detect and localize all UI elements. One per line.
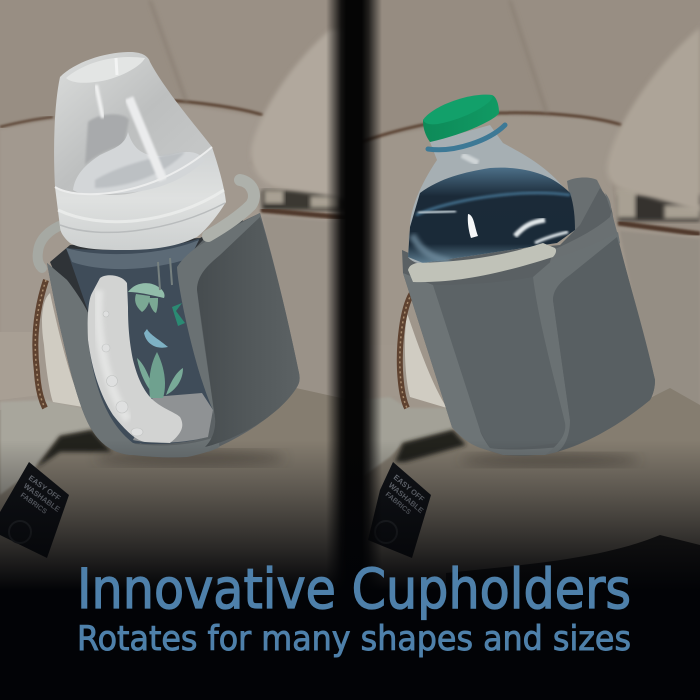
fabric label: FABRICS: [384, 491, 412, 516]
collar: [55, 147, 226, 250]
fabric label: EASY OFF: [392, 473, 426, 504]
fabric label: WASHABLE: [387, 481, 425, 515]
seat cushion: [0, 388, 342, 582]
holder right panel: [553, 237, 655, 402]
car seat backdrop: [0, 0, 350, 480]
holder rim band: [177, 213, 262, 452]
holder front body: [403, 193, 655, 455]
holder back shadow: [50, 220, 243, 312]
holder shadow: [460, 453, 640, 467]
seat back gap and piping: [262, 190, 350, 210]
car seat backdrop: [364, 0, 700, 434]
holder left strip: [403, 273, 560, 455]
title: Innovative Cupholders: [77, 557, 631, 621]
seat back gap and piping: [618, 195, 700, 221]
fabric label: FABRICS: [19, 492, 48, 516]
bottle cap: [423, 95, 499, 142]
fabric label: WASHABLE: [22, 481, 62, 514]
holder outer: [47, 213, 300, 457]
fabric label: [368, 462, 431, 558]
side fabric and piping: [405, 313, 447, 408]
subtitle: Rotates for many shapes and sizes: [77, 619, 631, 659]
holder rim: [550, 193, 620, 262]
cupholder back: [567, 178, 602, 230]
handle: [88, 275, 182, 443]
grey rim grips: [38, 224, 64, 268]
center divider: [326, 0, 382, 700]
dark floor mat: [446, 535, 700, 579]
bottle window: [66, 238, 213, 444]
dome: [54, 52, 212, 195]
seat cushion: [364, 388, 700, 582]
panel: sippy cup in cupholder: [0, 0, 344, 582]
water bottle: [408, 95, 575, 263]
fabric label: EASY OFF: [27, 473, 63, 503]
bottom fade: [0, 440, 700, 700]
cupholder: [38, 180, 300, 457]
panel: water bottle in cupholder: [364, 0, 700, 582]
side fabric and piping: [42, 293, 83, 407]
holder center panel: [433, 277, 565, 448]
bottle neck ring: [428, 125, 505, 150]
holder dark panel: [197, 217, 300, 447]
rim grip: [408, 243, 556, 282]
fabric label: [0, 462, 69, 558]
holder band: [533, 232, 620, 455]
holder shadow: [95, 450, 285, 466]
cup lid and collar: [54, 52, 226, 250]
holder left strip: [47, 263, 220, 457]
bottle decoration: [128, 258, 185, 398]
